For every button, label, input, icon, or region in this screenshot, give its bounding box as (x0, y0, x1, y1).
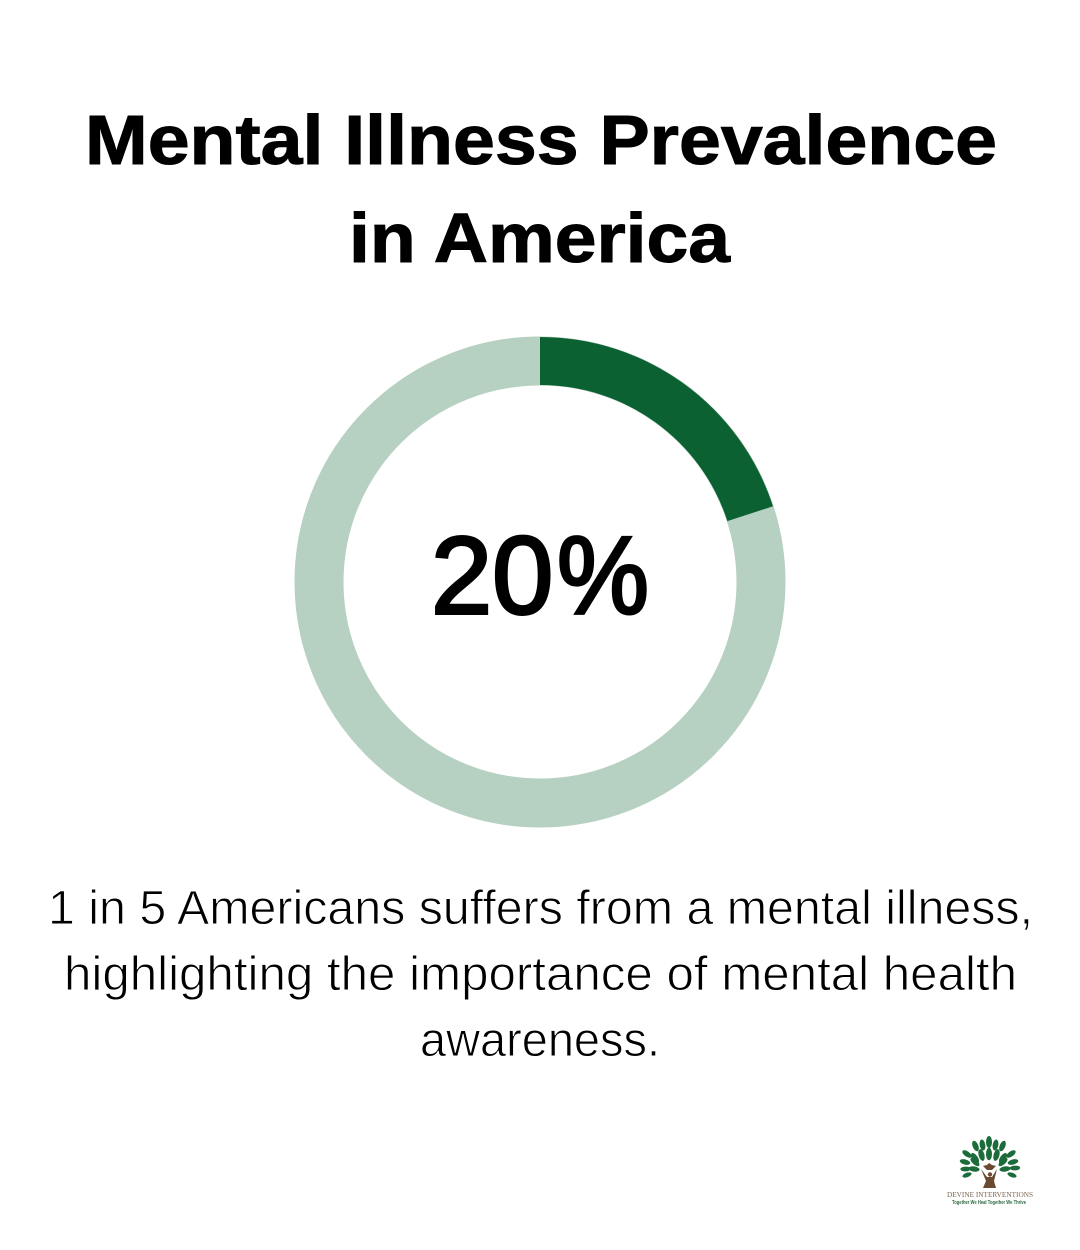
description text (48, 882, 1033, 1067)
title: in America (349, 199, 731, 277)
title: Mental Illness Prevalence (85, 101, 997, 179)
description text: 1 in 5 Americans suffers from a mental illness, (48, 882, 1033, 935)
donut value: 20 (431, 514, 553, 638)
description text: highlighting the importance of mental health (64, 948, 1017, 1001)
icon: tree (959, 1136, 1020, 1188)
donut chart: 20 percent (319, 337, 773, 803)
logo: Devine Interventions (947, 1136, 1033, 1206)
logo tagline: Together We Heal Together We Thrive (952, 1200, 1026, 1206)
description text: awareness. (420, 1014, 660, 1067)
donut value: % (557, 514, 649, 638)
title (85, 101, 997, 277)
logo name: DEVINE INTERVENTIONS (947, 1192, 1033, 1199)
